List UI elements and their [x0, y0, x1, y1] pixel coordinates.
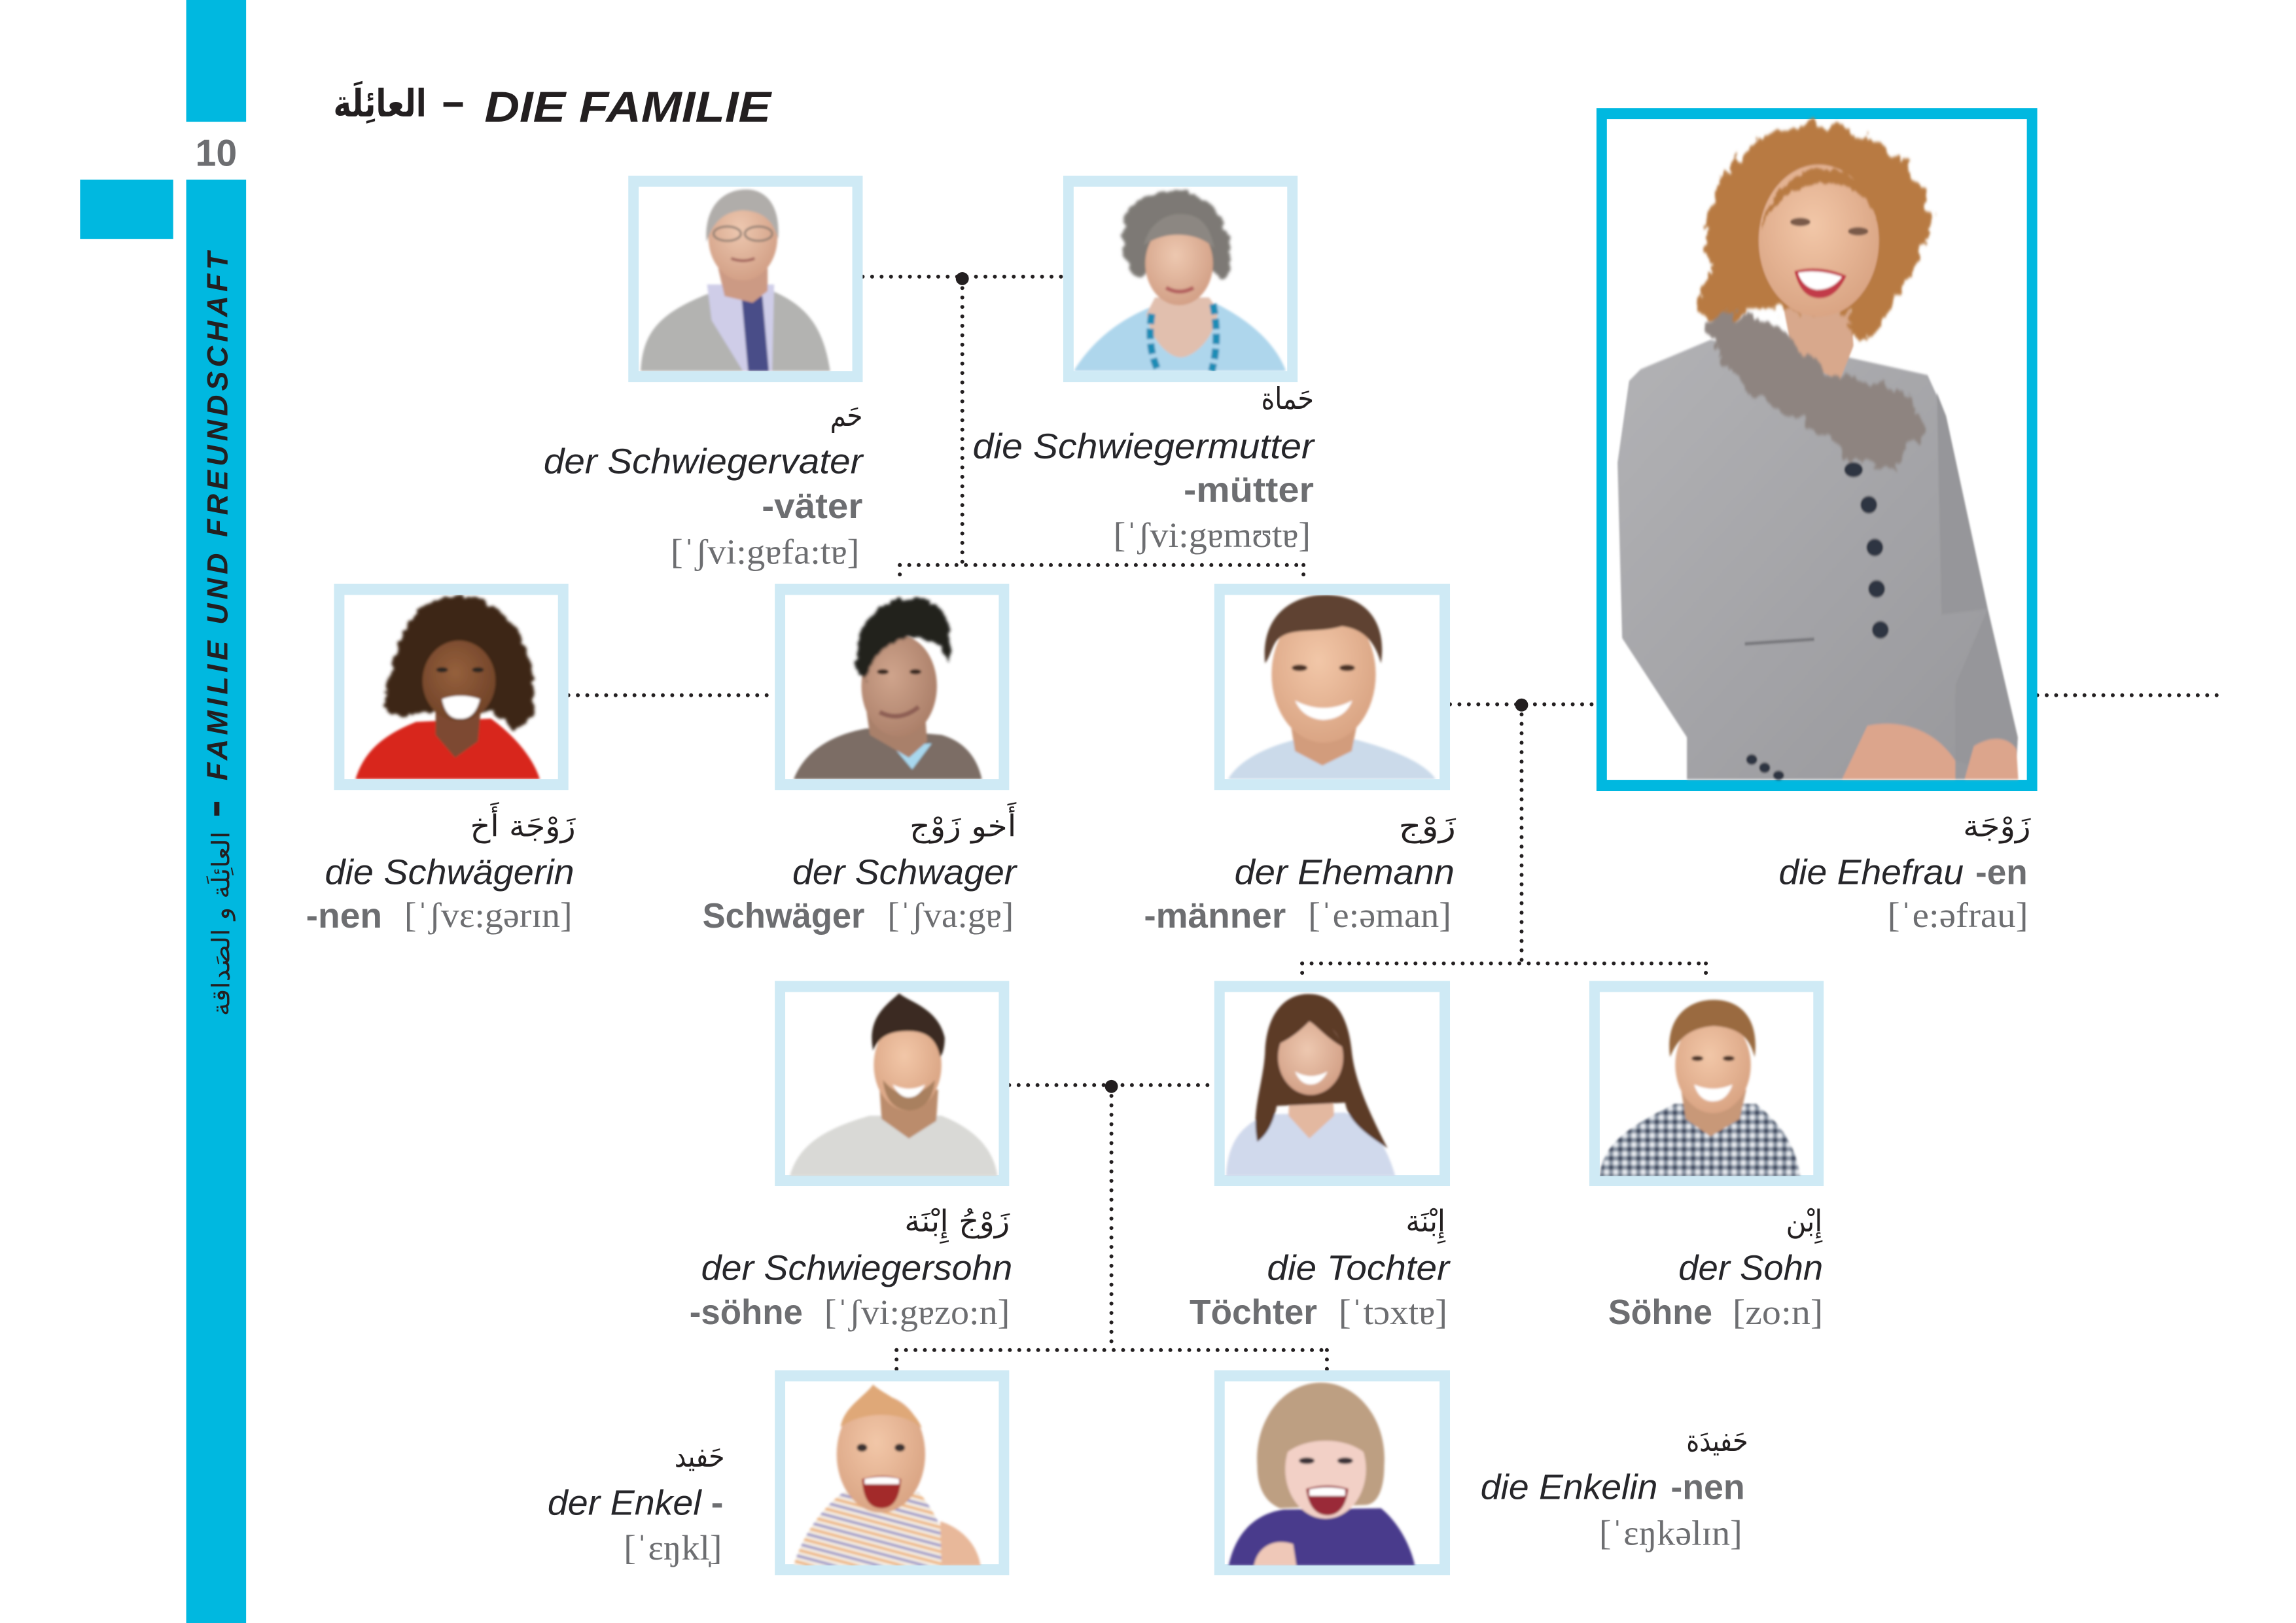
portrait: older man in cardigan	[641, 190, 830, 371]
German word: der Enkel	[548, 1484, 703, 1523]
German word: der Schwager	[792, 852, 1017, 892]
highlighted photo frame	[1597, 108, 2038, 791]
German word: die Enkelin	[1481, 1468, 1657, 1507]
phonetic: [ˈe:əman]	[1308, 896, 1451, 935]
panel: der Schwiegervater	[544, 176, 864, 572]
portrait: baby boy in striped shirt	[794, 1385, 981, 1565]
portrait: toddler girl in purple sweater	[1229, 1383, 1415, 1565]
sidebar: upper blue band	[186, 0, 246, 122]
chapter title dash	[214, 802, 219, 816]
Arabic label: حَماة	[1261, 381, 1314, 416]
German word: der Ehemann	[1235, 852, 1455, 892]
portrait: man in light shirt	[1228, 595, 1436, 779]
panel: die Schwaegerin	[306, 584, 576, 935]
portrait: older woman with necklace	[1074, 190, 1286, 371]
photo frame	[628, 176, 862, 382]
phonetic: [ˈʃvi:gɐzo:n]	[824, 1293, 1010, 1332]
Arabic label: أَخو زَوْج	[910, 802, 1017, 845]
title dash	[444, 102, 463, 107]
plural: -männer	[1144, 896, 1286, 935]
connector: parents	[1302, 699, 1706, 981]
German word: der Schwiegervater	[544, 442, 864, 481]
Arabic label: حَفيد	[675, 1439, 725, 1474]
photo frame	[1214, 981, 1450, 1186]
German word: die Schwiegermutter	[973, 427, 1315, 466]
chapter title German: FAMILIE UND FREUNDSCHAFT	[201, 249, 234, 780]
panel: der Schwiegersohn	[690, 981, 1012, 1332]
photo frame	[1214, 584, 1450, 790]
Arabic label: حَفيدَة	[1686, 1423, 1748, 1458]
panel: der Ehemann	[1144, 584, 1456, 935]
panel: die Enkelin	[1214, 1370, 1748, 1575]
plural: -nen	[306, 896, 382, 935]
portrait: man in grey t-shirt	[794, 599, 982, 779]
connector: grandparents	[862, 272, 1303, 584]
photo frame	[1214, 1370, 1450, 1575]
phonetic: [ˈʃvi:gɐfa:tɐ]	[671, 532, 859, 572]
phonetic: [ˈɛŋkl̩]	[624, 1528, 722, 1567]
Arabic label: زَوْجُ إِبْنَة	[904, 1204, 1010, 1244]
title German: DIE FAMILIE	[484, 83, 773, 131]
connector: children	[896, 1080, 1327, 1370]
phonetic: [ˈʃvi:gɐmʊtɐ]	[1114, 515, 1311, 555]
plural: Töchter	[1190, 1293, 1317, 1332]
sidebar: blue square tab	[80, 180, 173, 239]
panel: die Ehefrau	[1597, 108, 2038, 935]
Arabic label: زَوْجَة أَخ	[470, 802, 576, 845]
photo frame	[334, 584, 569, 790]
German word: der Sohn	[1678, 1248, 1823, 1287]
plural: -söhne	[690, 1293, 803, 1332]
plural: -en	[1975, 852, 2028, 892]
title Arabic: العائِلَة	[333, 80, 427, 126]
portrait: woman in grey jacket with fur scarf	[1617, 125, 2019, 780]
portrait: woman in red shirt	[355, 596, 540, 779]
German word: der Schwiegersohn	[701, 1248, 1012, 1287]
photo frame	[775, 584, 1009, 790]
chapter title Arabic: العائِلَة و الصَداقة	[206, 831, 236, 1016]
plural: -	[711, 1484, 724, 1523]
page number: 10	[196, 133, 237, 175]
Arabic label: حَم	[830, 398, 862, 433]
plural: Söhne	[1608, 1293, 1712, 1332]
connector: Ehefrau to right edge	[2038, 693, 2219, 697]
photo frame	[775, 1370, 1009, 1575]
connector dot	[1105, 1080, 1118, 1093]
portrait: young man in grey polo	[790, 993, 997, 1176]
title	[333, 80, 773, 131]
phonetic: [ˈʃva:gɐ]	[887, 896, 1014, 935]
Arabic label: زَوْجَة	[1963, 809, 2031, 845]
plural: -nen	[1670, 1468, 1745, 1507]
photo frame	[1063, 176, 1298, 382]
plural: Schwäger	[703, 896, 865, 935]
plural: -mütter	[1184, 470, 1314, 510]
sidebar: lower blue band	[186, 180, 246, 1623]
connector: Schwaegerin to Schwager	[569, 693, 775, 697]
panel: der Sohn	[1589, 981, 1824, 1332]
German word: die Tochter	[1267, 1248, 1451, 1287]
phonetic: [zo:n]	[1733, 1293, 1823, 1332]
panel: die Tochter	[1190, 981, 1451, 1332]
Arabic label: زَوْج	[1398, 809, 1456, 845]
Arabic label: إِبْنَة	[1405, 1204, 1445, 1244]
phonetic: [ˈe:əfrau]	[1888, 896, 2028, 935]
panel: der Enkel	[548, 1370, 1009, 1575]
plural: -väter	[762, 487, 863, 526]
photo frame	[775, 981, 1009, 1186]
German word: die Ehefrau	[1779, 852, 1964, 892]
Arabic label: إِبْن	[1786, 1204, 1822, 1244]
connector dot	[1515, 699, 1528, 712]
portrait: young man in checked shirt	[1600, 1000, 1800, 1176]
German word: die Schwägerin	[325, 852, 574, 892]
portrait: young woman with long brown hair	[1226, 994, 1395, 1176]
phonetic: [ˈɛŋkəlɪn]	[1599, 1513, 1742, 1552]
phonetic: [ˈʃvɛ:gərɪn]	[404, 896, 573, 935]
connector dot	[956, 272, 969, 285]
panel: der Schwager	[703, 584, 1017, 935]
photo frame	[1589, 981, 1824, 1186]
panel: die Schwiegermutter	[973, 176, 1315, 555]
phonetic: [ˈtɔxtɐ]	[1339, 1293, 1447, 1332]
sidebar vertical chapter title	[201, 249, 236, 1016]
